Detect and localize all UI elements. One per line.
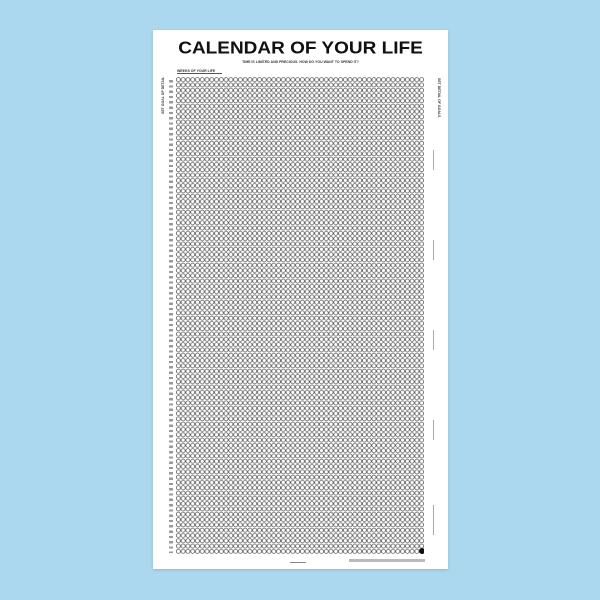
footer note: [349, 559, 425, 562]
weeks label: [177, 69, 222, 74]
poster: [153, 30, 448, 569]
weeks label: WEEKS OF YOUR LIFE: [177, 69, 215, 73]
row numbers: [169, 77, 173, 553]
title: CALENDAR OF YOUR LIFE: [178, 39, 423, 58]
end dot: [419, 548, 425, 554]
right side markers: [433, 150, 434, 535]
subtitle: TIME IS LIMITED AND PRECIOUS. HOW DO YOU WANT TO SPEND IT?: [242, 60, 359, 64]
left vertical label: SET GOAL OF DETAIL: [161, 77, 165, 114]
grid of weeks: [176, 77, 424, 554]
right vertical label: SET DETAIL OF GOALS: [437, 78, 441, 117]
footer brand: [290, 562, 306, 563]
